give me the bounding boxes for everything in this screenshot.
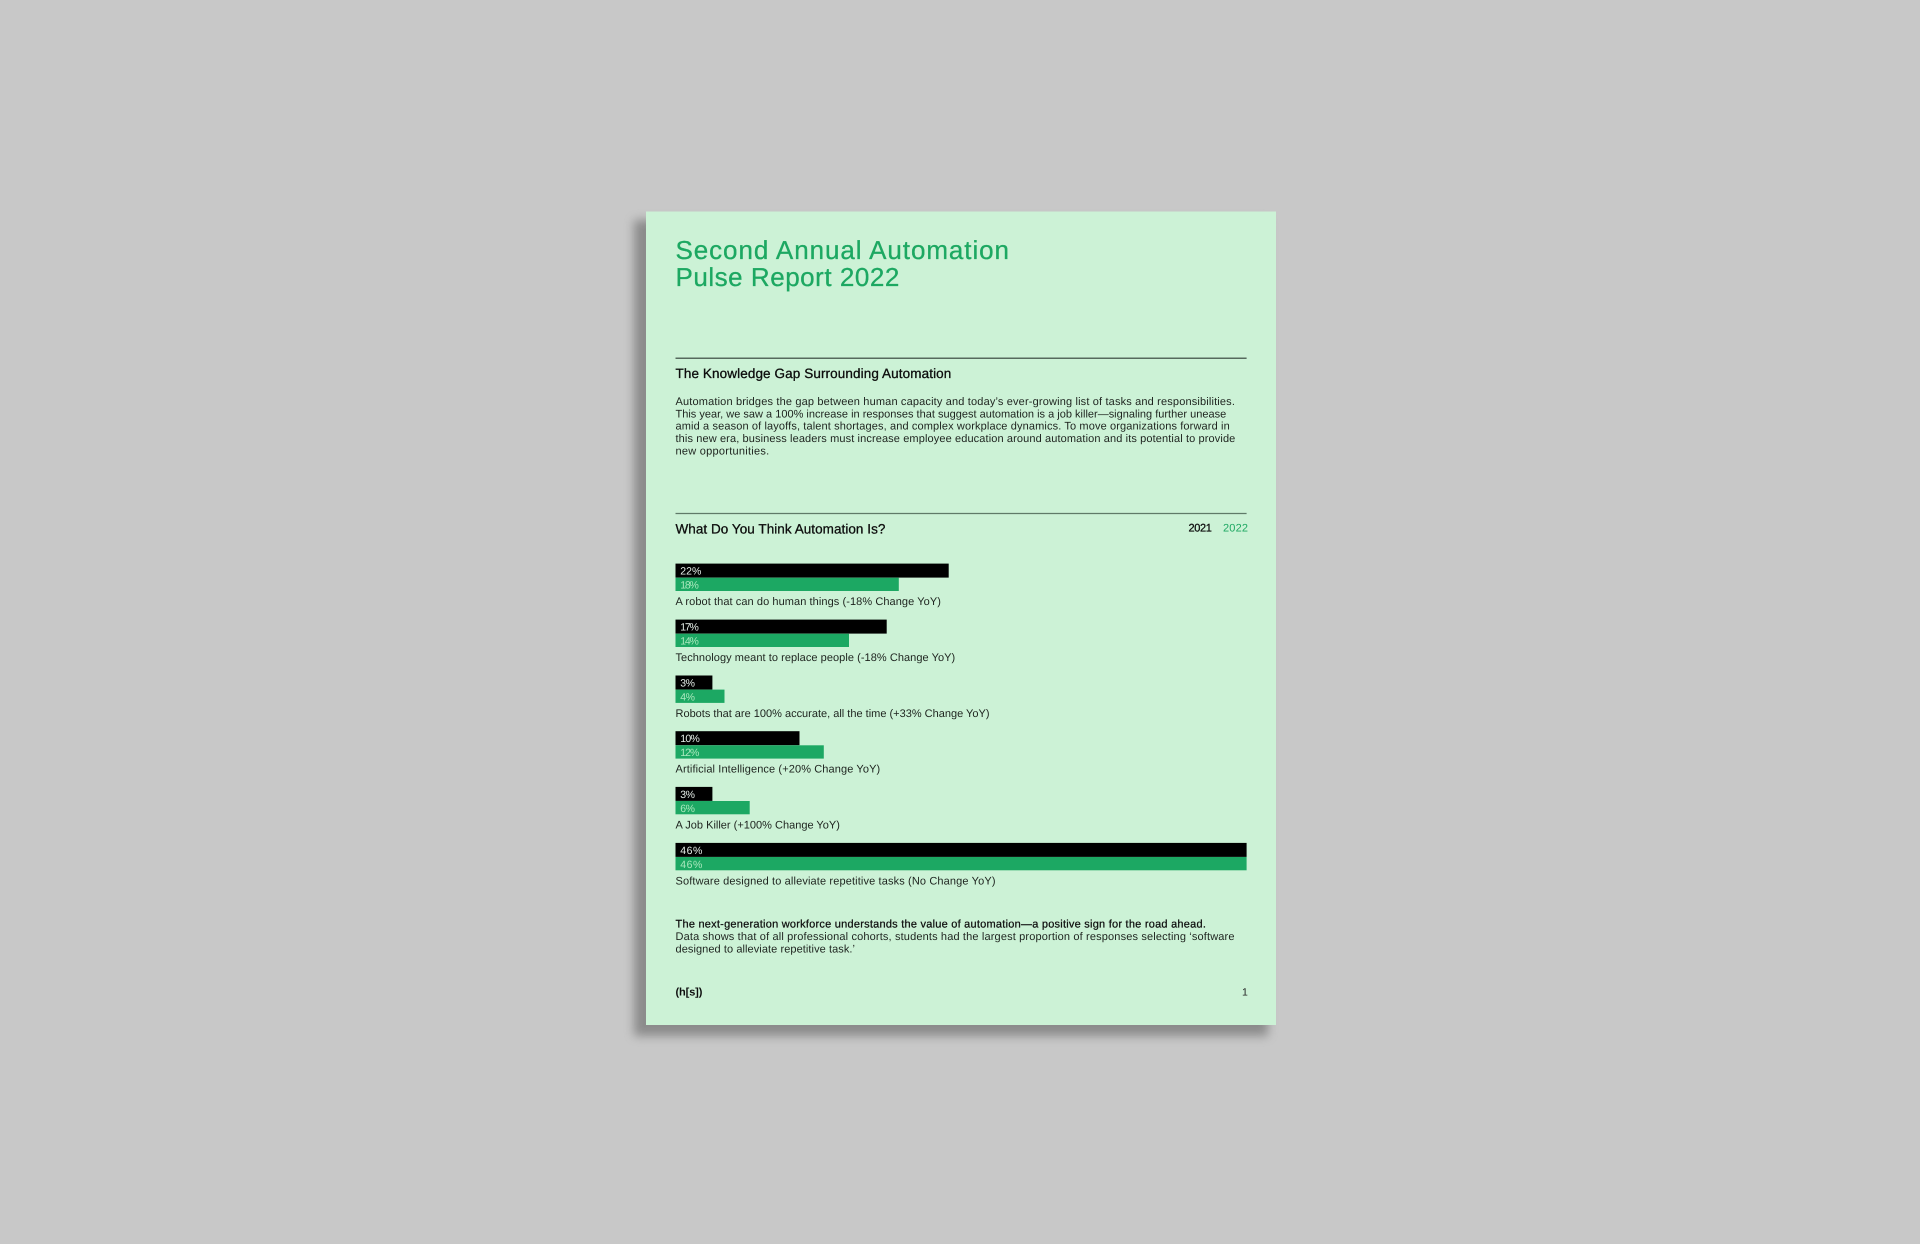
bar group: accurate robots: [676, 676, 990, 720]
callout: next-generation workforce: designed to alleviate repetitive task.’: [676, 943, 855, 955]
bar group: a robot: A robot that can do human things (-18% Change YoY): [676, 596, 941, 608]
heading: knowledge gap: The Knowledge Gap Surrounding Automation: [676, 366, 951, 381]
text block: intro paragraph: [676, 396, 1235, 457]
bar group: a robot: 22%: [680, 566, 701, 578]
bar group: replace people: 14%: [680, 636, 699, 648]
bar chart: what automation is: [676, 564, 1247, 887]
bar group: accurate robots: Robots that are 100% accurate, all the time (+33% Change YoY): [676, 708, 990, 720]
bar group: replace people: [676, 620, 955, 664]
title: [676, 235, 1009, 292]
logo: (h[s]): [676, 987, 703, 999]
bar group: artificial intelligence: Artificial Intelligence (+20% Change YoY): [676, 764, 880, 776]
bar group: software: 46%: [680, 859, 702, 871]
text block: intro paragraph: amid a season of layoffs, talent shortages, and complex workplace dynamics. To move organizations forward in: [676, 421, 1230, 433]
legend: years: 2022: [1223, 522, 1248, 534]
bar group: job killer: A Job Killer (+100% Change YoY): [676, 819, 840, 831]
legend: years: [1188, 522, 1248, 534]
bar group: a robot: [676, 564, 949, 608]
callout: next-generation workforce: [676, 919, 1234, 955]
heading: chart title: What Do You Think Automation Is?: [676, 521, 885, 536]
title: Pulse Report 2022: [676, 262, 899, 292]
title: Second Annual Automation: [676, 235, 1009, 265]
bar group: software: 46%: [680, 845, 702, 857]
legend: years: 2021: [1188, 522, 1212, 534]
bar group: job killer: 6%: [680, 803, 695, 815]
page number: 1: [1242, 987, 1248, 999]
bar group: job killer: 3%: [680, 789, 695, 801]
text block: intro paragraph: Automation bridges the gap between human capacity and today’s ever-growing list of tasks and responsibilities.: [676, 396, 1235, 408]
bar group: artificial intelligence: [676, 731, 880, 776]
bar group: accurate robots: 3%: [680, 678, 695, 690]
bar group: replace people: Technology meant to replace people (-18% Change YoY): [676, 652, 955, 664]
bar group: a robot: 18%: [680, 580, 699, 592]
text block: intro paragraph: new opportunities.: [676, 445, 769, 457]
bar group: accurate robots: 4%: [680, 692, 695, 704]
callout: next-generation workforce: The next-generation workforce understands the value of automation—a positive sign for the road ahead.: [676, 919, 1206, 931]
bar group: software: [676, 843, 1247, 887]
callout: next-generation workforce: Data shows that of all professional cohorts, students had the largest proportion of responses selecting ‘software: [676, 931, 1234, 943]
bar group: replace people: 17%: [680, 622, 699, 634]
bar group: job killer: [676, 787, 840, 831]
panel: report page: [646, 212, 1276, 1025]
bar group: software: Software designed to alleviate repetitive tasks (No Change YoY): [676, 875, 996, 887]
bar group: artificial intelligence: 10%: [680, 733, 700, 745]
text block: intro paragraph: this new era, business leaders must increase employee education around automation and its potential to provide: [676, 433, 1235, 445]
text block: intro paragraph: This year, we saw a 100% increase in responses that suggest automation is a job killer—signaling further unease: [676, 408, 1226, 420]
bar group: artificial intelligence: 12%: [680, 747, 699, 759]
